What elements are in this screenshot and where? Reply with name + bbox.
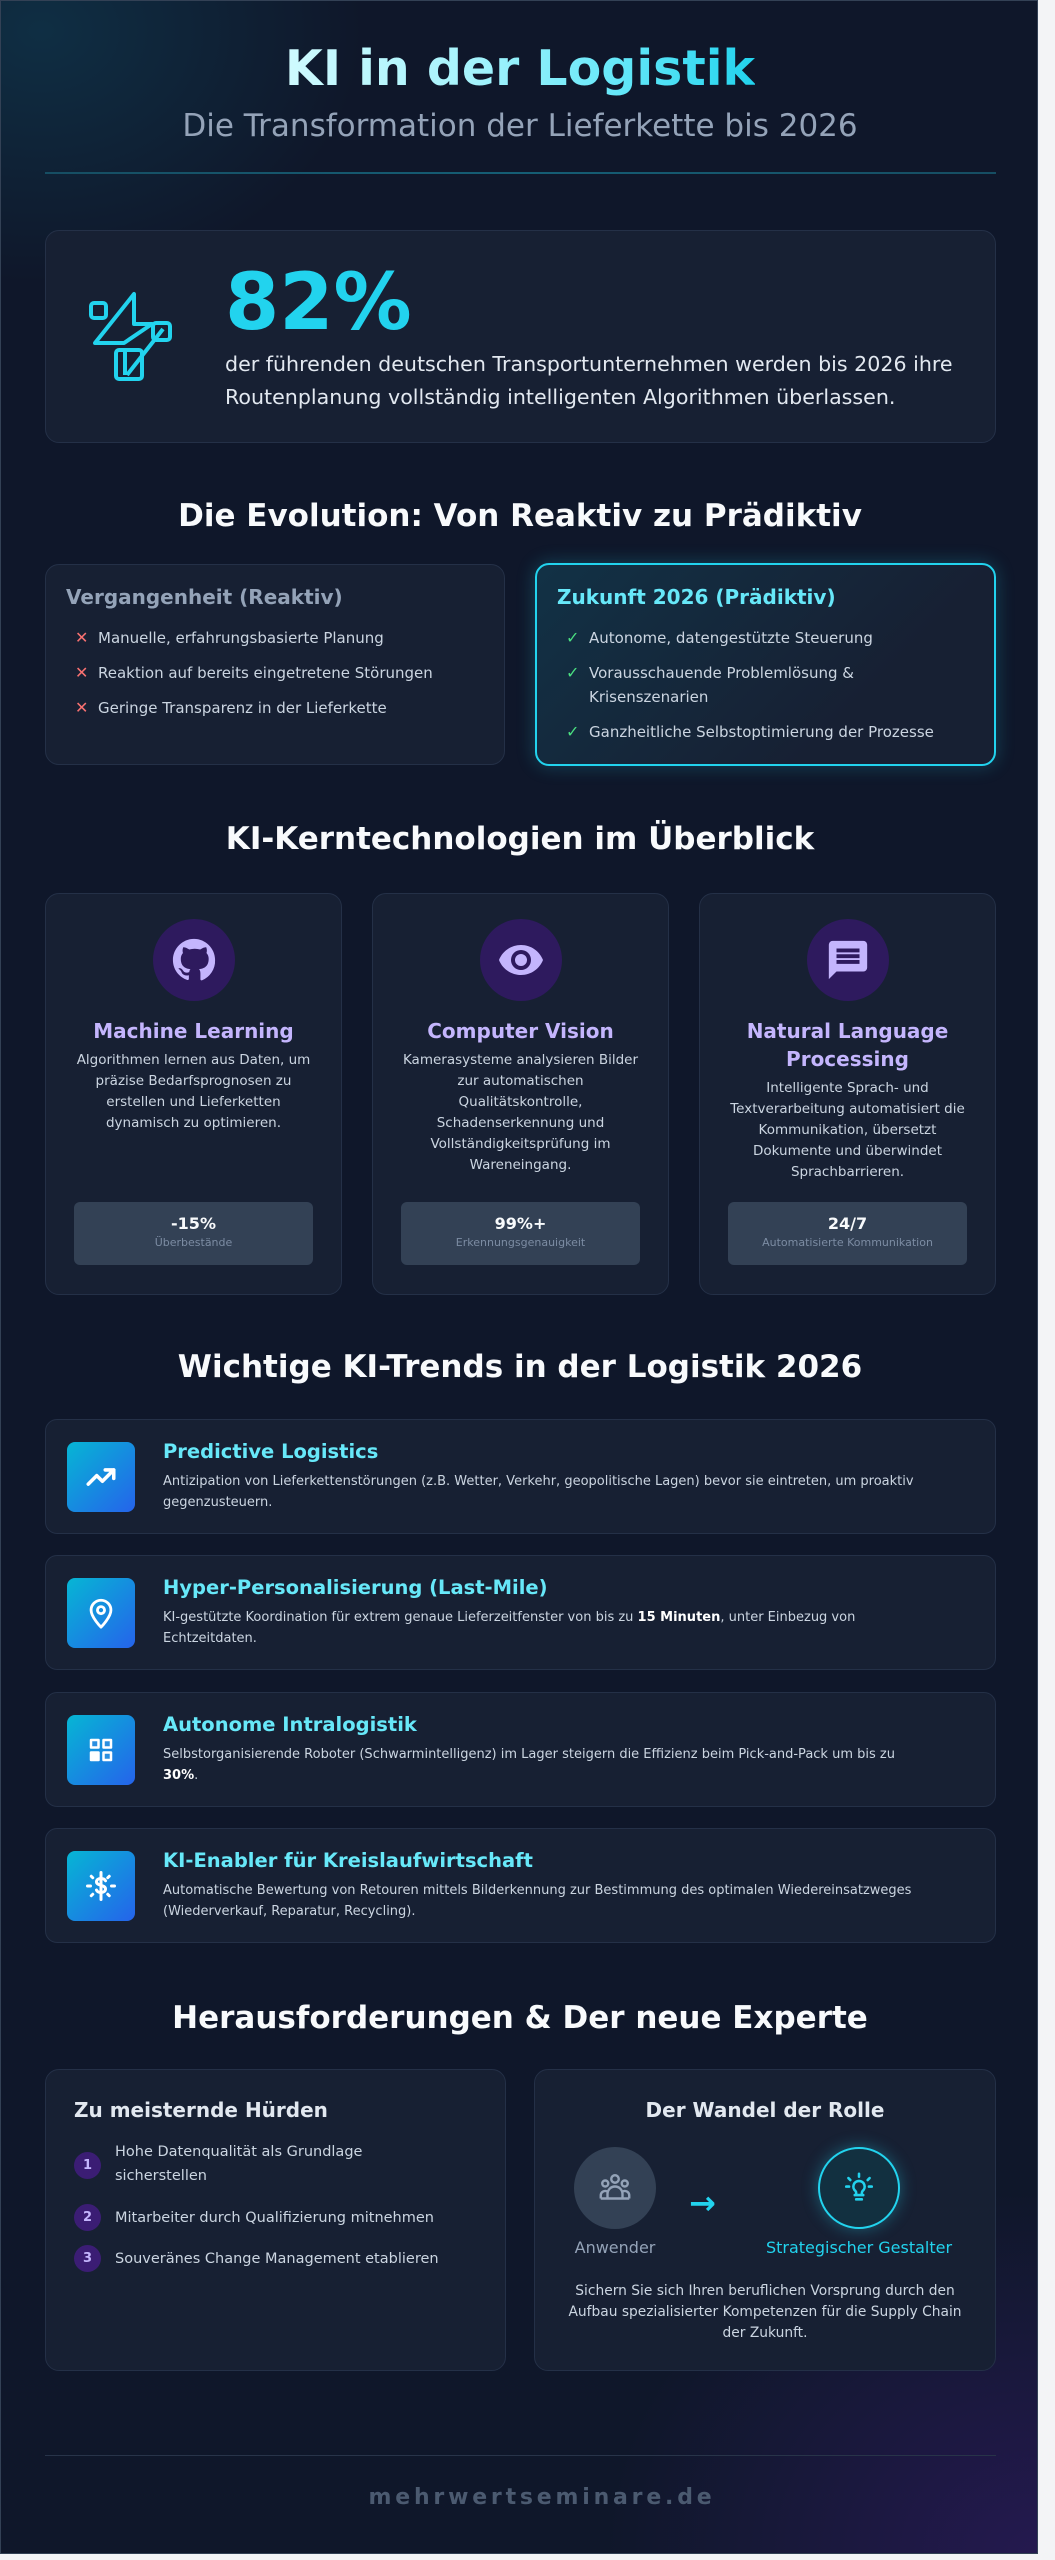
stat: 24/7 <box>828 1214 867 1233</box>
title: Machine Learning <box>93 1019 294 1043</box>
panel: past reactive <box>45 564 505 765</box>
icon: AI routing <box>89 292 172 381</box>
heading: evolution: Die Evolution: Von Reaktiv zu Prädiktiv <box>178 498 862 534</box>
trend: circular economy: Automatische Bewertung von Retouren mittels Bilderkennung zur Bestimmung des optimalen Wiedereinsatzweges <box>163 1883 911 1898</box>
stat <box>728 1202 967 1265</box>
icon: chat <box>807 919 889 1001</box>
heading: Vergangenheit (Reaktiv) <box>66 585 343 609</box>
description: der Zukunft. <box>723 2325 807 2341</box>
panel: NLP <box>699 893 996 1295</box>
list item 1: 1 <box>83 2158 92 2173</box>
description: Sichern Sie sich Ihren beruflichen Vorsprung durch den <box>575 2283 955 2299</box>
panel: role change <box>534 2069 996 2371</box>
panel: hurdles <box>45 2069 506 2371</box>
list item 2: 2 <box>83 2210 92 2225</box>
title: Processing <box>786 1047 909 1071</box>
list item: Geringe Transparenz in der Lieferkette <box>98 699 387 717</box>
icon: trending up <box>67 1442 135 1512</box>
stat: 99%+ <box>495 1214 546 1233</box>
trend: circular economy <box>45 1828 996 1943</box>
trend: predictive logistics: Antizipation von Lieferkettenstörungen (z.B. Wetter, Verkehr, geopolitische Lagen) bevor sie eintreten, um proaktiv gegenzusteuern. <box>163 1474 914 1510</box>
heading: Zukunft 2026 (Prädiktiv) <box>557 585 836 609</box>
trend: hyper personalisation: KI-gestützte Koordination für extrem genaue Lieferzeitfenster von bis zu 15 Minuten, unter Einbezug von <box>163 1610 855 1625</box>
panel: machine learning <box>45 893 342 1295</box>
icon: grid <box>67 1715 135 1785</box>
stat description: der führenden deutschen Transportunternehmen werden bis 2026 ihre Routenplanung vollständig intelligenten Algorithmen überlassen. <box>225 352 953 409</box>
description: Algorithmen lernen aus Daten, um präzise Bedarfsprognosen zu erstellen und Lieferketten dynamisch zu optimieren. <box>77 1052 310 1131</box>
panel: past reactive: ✕ <box>75 663 88 682</box>
list item 3 <box>74 2245 439 2272</box>
stat: Überbestände <box>155 1236 232 1249</box>
list item: Ganzheitliche Selbstoptimierung der Prozesse <box>589 723 934 741</box>
trend: hyper personalisation: Echtzeitdaten. <box>163 1630 257 1646</box>
panel: past reactive: ✕ <box>75 698 88 717</box>
panel: future predictive <box>535 563 996 766</box>
list item 2 <box>74 2204 434 2231</box>
stat <box>401 1202 640 1265</box>
panel: future predictive: ✓ <box>566 628 579 647</box>
trend: circular economy: KI-Enabler für Kreislaufwirtschaft <box>163 1849 533 1872</box>
heading: trends: Wichtige KI-Trends in der Logistik 2026 <box>178 1349 862 1385</box>
trend: circular economy: (Wiederverkauf, Reparatur, Recycling). <box>163 1904 416 1918</box>
icon: bulb (Gestalter) <box>818 2147 900 2229</box>
panel: past reactive: ✕ <box>75 628 88 647</box>
title: Natural Language <box>747 1019 948 1043</box>
stat: Automatisierte Kommunikation <box>762 1236 933 1249</box>
list item: Autonome, datengestützte Steuerung <box>589 629 873 647</box>
label: Anwender: Anwender <box>575 2238 655 2257</box>
title <box>747 1019 948 1071</box>
list item: Vorausschauende Problemlösung & Krisenszenarien <box>589 664 854 706</box>
trend: autonomous intralogistics: 30%. <box>163 1768 198 1782</box>
description: Aufbau spezialisierter Kompetenzen für die Supply Chain <box>568 2304 962 2320</box>
arrow: → <box>689 2184 716 2222</box>
stat: -15% <box>171 1214 216 1233</box>
description: Intelligente Sprach- und Textverarbeitung automatisiert die Kommunikation, übersetzt Dokumente und überwindet Sprachbarrieren. <box>730 1080 965 1180</box>
heading: challenges: Herausforderungen & Der neue Experte <box>172 2000 868 2036</box>
trend: autonomous intralogistics: Selbstorganisierende Roboter (Schwarmintelligenz) im Lager steigern die Effizienz beim Pick-and-Pack um bis zu <box>163 1747 895 1762</box>
big number: 82% <box>225 258 412 348</box>
icon: map pin <box>67 1578 135 1648</box>
panel: computer vision <box>372 893 669 1295</box>
description: Kamerasysteme analysieren Bilder zur automatischen Qualitätskontrolle, Schadenserkennung und Vollständigkeitsprüfung im Wareneingang. <box>403 1052 638 1173</box>
panel: future predictive: ✓ <box>566 722 579 741</box>
list item 3: 3 <box>83 2251 92 2266</box>
trend: autonomous intralogistics <box>45 1692 996 1807</box>
icon: users (Anwender) <box>574 2147 656 2229</box>
subtitle: Die Transformation der Lieferkette bis 2026 <box>182 108 858 144</box>
trend: predictive logistics <box>45 1419 996 1534</box>
panel: key statistic <box>45 230 996 443</box>
heading: core technologies: KI-Kerntechnologien im Überblick <box>226 821 814 857</box>
stat: Erkennungsgenauigkeit <box>456 1236 585 1249</box>
title: KI in der Logistik <box>285 40 755 97</box>
heading: Der Wandel der Rolle <box>646 2098 884 2122</box>
stat <box>74 1202 313 1265</box>
icon: github <box>153 919 235 1001</box>
heading: Zu meisternde Hürden <box>74 2098 328 2122</box>
label: Strategischer Gestalter: Strategischer Gestalter <box>766 2238 952 2257</box>
trend: autonomous intralogistics: Autonome Intralogistik <box>163 1713 417 1736</box>
title: Computer Vision <box>427 1019 614 1043</box>
description <box>568 2283 962 2341</box>
icon: dollar sparkle <box>67 1851 135 1921</box>
trend: hyper personalisation <box>45 1555 996 1670</box>
list item 3: Souveränes Change Management etablieren <box>115 2251 439 2267</box>
trend: predictive logistics: Predictive Logistics <box>163 1440 378 1463</box>
list item 1: Hohe Datenqualität als Grundlage sicherstellen <box>115 2144 362 2184</box>
icon: eye <box>480 919 562 1001</box>
list item 2: Mitarbeiter durch Qualifizierung mitnehmen <box>115 2210 434 2226</box>
panel: future predictive: ✓ <box>566 663 579 682</box>
trend: hyper personalisation: Hyper-Personalisierung (Last-Mile) <box>163 1576 548 1599</box>
footer brand: mehrwertseminare.de <box>369 2485 715 2510</box>
list item: Manuelle, erfahrungsbasierte Planung <box>98 629 384 647</box>
list item: Reaktion auf bereits eingetretene Störungen <box>98 664 433 682</box>
